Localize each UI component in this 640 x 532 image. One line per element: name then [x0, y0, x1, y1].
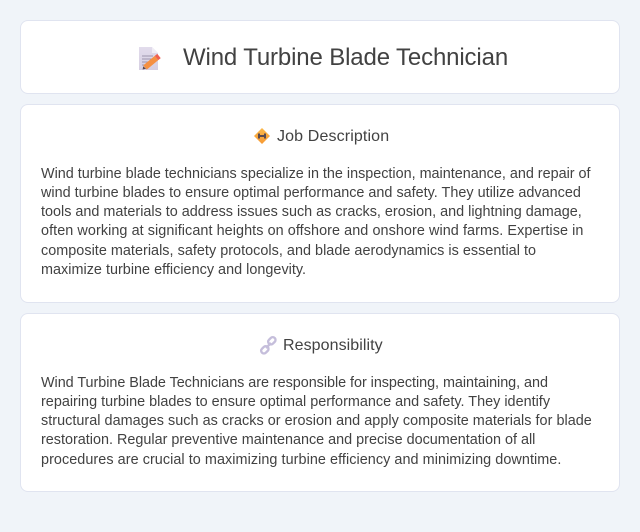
icon: diamond sign — [254, 128, 270, 144]
text: Wind turbine blade technicians specialize in the inspection, maintenance, and repair of — [41, 166, 591, 182]
heading: job description: Job Description — [277, 128, 389, 145]
text: structural damages such as cracks or erosion and apply composite materials for blade — [41, 413, 592, 429]
text: tools and materials to address issues such as cracks, erosion, and lightning damage, — [41, 204, 582, 220]
panel: job description — [20, 104, 620, 303]
icon: document with pencil — [139, 47, 161, 70]
text: Wind Turbine Blade Technicians are responsible for inspecting, maintaining, and — [41, 375, 548, 391]
heading: responsibility: Responsibility — [283, 337, 383, 354]
text: maximize turbine efficiency and longevity. — [41, 262, 306, 278]
panel: title card — [20, 20, 620, 94]
text: composite materials, safety protocols, and blade aerodynamics is essential to — [41, 243, 536, 259]
title: Wind Turbine Blade Technician — [183, 44, 508, 71]
text: responsibility — [41, 375, 592, 468]
text: often working at significant heights on offshore and onshore wind farms. Expertise in — [41, 223, 583, 239]
panel: responsibility — [20, 313, 620, 492]
text: procedures are crucial to maximizing turbine efficiency and minimizing downtime. — [41, 452, 561, 468]
text: wind turbine blades to ensure optimal performance and safety. They utilize advanced — [41, 185, 581, 201]
text: repairing turbine blades to ensure optimal performance and safety. They identify — [41, 394, 550, 410]
text: restoration. Regular preventive maintenance and precise documentation of all — [41, 432, 535, 448]
icon: chain link — [260, 336, 277, 355]
text: job description — [41, 166, 591, 278]
